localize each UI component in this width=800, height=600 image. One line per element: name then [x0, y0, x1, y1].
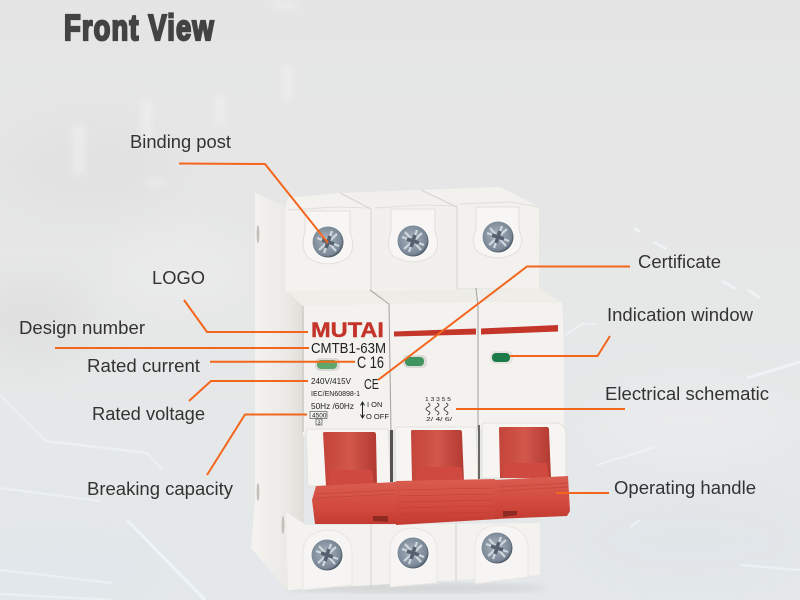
electrical schematic symbol: 2/ 4/ 6/ [426, 417, 453, 423]
leader line: logo [184, 300, 308, 332]
current rating: C 16 [357, 354, 384, 372]
electrical schematic symbol [425, 397, 453, 423]
leader line: rated voltage [189, 381, 308, 401]
indication window 1 [315, 358, 340, 371]
drop shadow [285, 583, 545, 593]
leader line: design number [55, 347, 309, 349]
breaking capacity box [310, 412, 327, 426]
on off arrow: O OFF [366, 412, 389, 421]
screw: lower 2 [396, 536, 430, 570]
screw: upper 1 [312, 226, 344, 258]
electrical schematic symbol: 1 3 3 5 5 [425, 397, 451, 403]
red stripe [394, 325, 558, 336]
frequency: 50Hz /60Hz [311, 401, 354, 411]
breaking capacity box: 3 [318, 420, 321, 426]
red tie bar [312, 476, 570, 525]
lower terminal blocks [286, 512, 540, 590]
label: logo: LOGO [152, 268, 205, 288]
leader line: electrical schematic [456, 408, 625, 410]
leader line: indication window [510, 336, 610, 356]
title: Front View [64, 7, 215, 48]
handle 1 [323, 432, 377, 486]
leader line: rated current [210, 361, 355, 363]
label: breaking capacity: Breaking capacity [87, 479, 233, 499]
leader line: breaking capacity [207, 414, 307, 475]
handle 3 [499, 427, 551, 478]
label: design number: Design number [19, 318, 145, 338]
indication window 2 [403, 355, 427, 368]
label: certificate: Certificate [638, 252, 721, 272]
handle steps [329, 463, 549, 485]
voltage rating: 240V/415V [311, 376, 351, 386]
screw: upper 2 [396, 224, 430, 258]
indication window 3 [490, 351, 513, 364]
screw: upper 3 [482, 220, 514, 254]
leader line: operating handle [556, 492, 609, 494]
label: operating handle: Operating handle [614, 478, 756, 498]
CE mark: CE [364, 376, 379, 393]
front panel [287, 288, 564, 436]
label: rated voltage: Rated voltage [92, 404, 205, 424]
label: binding post: Binding post [130, 132, 231, 152]
left side of housing [251, 193, 304, 590]
leader line: binding post [179, 164, 328, 243]
on off arrow: I ON [367, 400, 382, 409]
circuit breaker product photo [251, 187, 570, 593]
upper terminal blocks [285, 187, 539, 292]
model number: CMTB1-63M [311, 341, 386, 357]
standard: IEC/EN60898-1 [311, 389, 360, 398]
handle surrounds [306, 423, 566, 486]
label: electrical schematic: Electrical schematic [605, 384, 769, 404]
handle 2 [411, 430, 464, 482]
leader line: certificate [378, 266, 630, 380]
breaking capacity box: 4500 [312, 412, 327, 420]
logo text: MUTAI [311, 319, 384, 342]
label: indication window: Indication window [607, 305, 754, 325]
label: rated current: Rated current [87, 356, 200, 376]
screw: lower 1 [310, 538, 344, 572]
screw: lower 3 [480, 532, 514, 564]
on off arrow [360, 400, 389, 421]
